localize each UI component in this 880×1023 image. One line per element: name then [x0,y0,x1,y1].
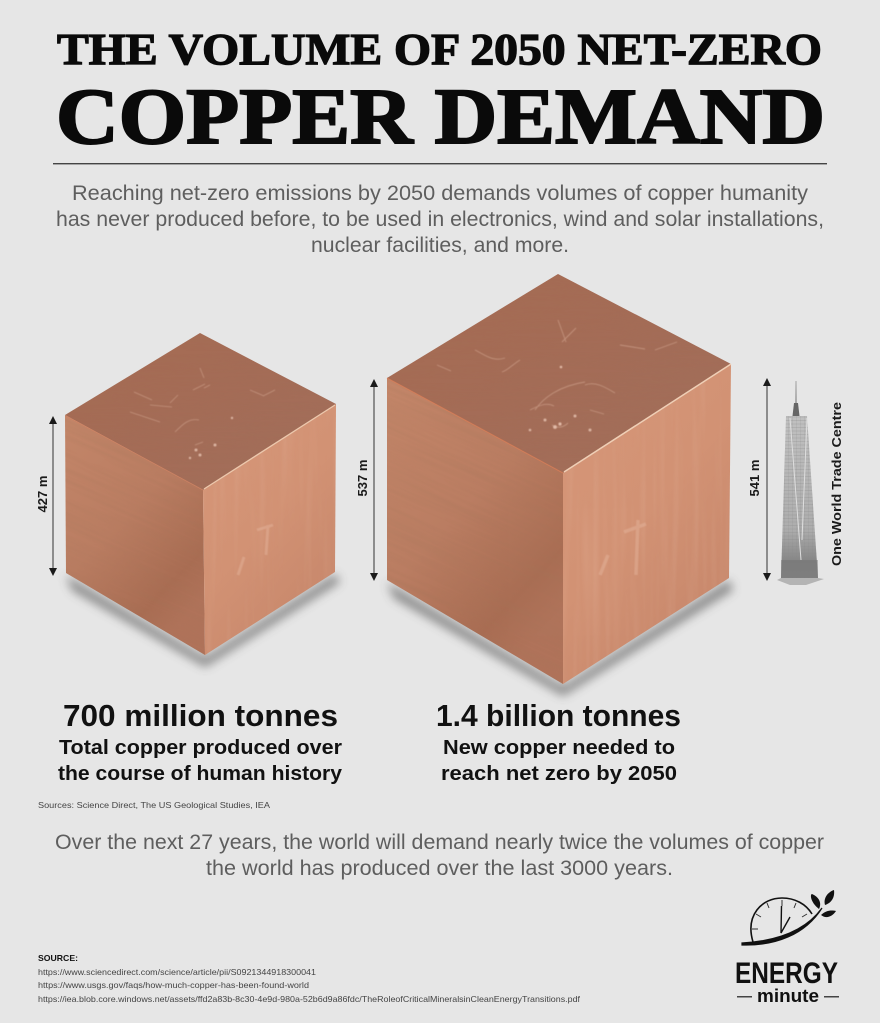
intro text: Reaching net-zero emissions by 2050 demands volumes of copper humanity [72,182,809,205]
wordmark [735,957,839,1006]
dimension: 427 m: 427 m [35,476,50,512]
top face [380,270,735,475]
title [56,25,825,161]
small copper cube: 700 million tonnes [63,333,344,672]
stat: 700 million tonnes [58,698,343,785]
left face [65,415,205,655]
stat: 1.4 billion tonnes: reach net zero by 2050 [441,762,677,785]
sources note: Sources: Science Direct, The US Geological Studies, IEA [38,800,270,810]
intro text: has never produced before, to be used in electronics, wind and solar installations, [56,208,824,231]
stat: 1.4 billion tonnes: New copper needed to [443,736,675,759]
divider rule [53,163,827,164]
source list: SOURCE: [38,953,78,963]
cube edges [66,416,203,490]
intro text [56,182,824,257]
logo: Energy Minute [735,890,839,1006]
title: COPPER DEMAND [56,74,825,161]
closing statement [55,831,824,880]
icon: One World Trade Centre tower [777,381,824,585]
icon: clock and leaves [742,890,836,945]
dimension: 541 m: 541 m [747,460,762,496]
top face [60,330,340,495]
left face [387,378,563,684]
right face [560,360,735,690]
intro text: nuclear facilities, and more. [311,234,569,257]
dimension: 537 m: 537 m [355,460,370,496]
title: THE VOLUME OF 2050 NET-ZERO [57,25,822,74]
wordmark: ENERGY [735,957,838,990]
source list: https://iea.blob.core.windows.net/assets/ffd2a83b-8c30-4e9d-980a-52b6d9a86fdc/TheRoleofCriticalMineralsinCleanEnergyTransitions.pdf [38,994,581,1004]
stat: 700 million tonnes: Total copper produced over [59,736,342,759]
closing statement: Over the next 27 years, the world will demand nearly twice the volumes of copper [55,831,824,854]
tower label: One World Trade Centre [829,402,844,566]
right face [200,400,340,660]
source list: https://www.sciencedirect.com/science/article/pii/S0921344918300041 [38,967,316,977]
large copper cube: 1.4 billion tonnes [226,230,737,802]
stat: 700 million tonnes: 700 million tonnes [63,698,338,733]
stat: 700 million tonnes: the course of human history [58,762,343,785]
wordmark: minute [757,986,819,1006]
stat: 1.4 billion tonnes [436,698,681,785]
source list [38,953,581,1004]
stat: 1.4 billion tonnes: 1.4 billion tonnes [436,698,681,733]
cube edges [387,378,563,473]
source list: https://www.usgs.gov/faqs/how-much-copper-has-been-found-world [38,980,309,990]
closing statement: the world has produced over the last 3000 years. [206,857,673,880]
